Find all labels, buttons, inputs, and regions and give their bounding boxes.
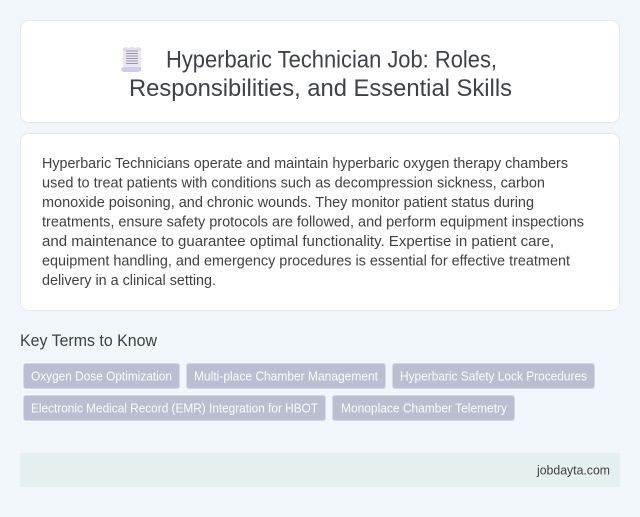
icon: document scroll — [121, 47, 141, 72]
tag: safety lock — [392, 364, 594, 388]
text block: job description: equipment handling, and emergency procedures is essential for effective treatment — [42, 254, 570, 270]
tag: multi-place chamber — [186, 364, 386, 388]
tag list: key terms — [24, 364, 594, 420]
tag: monoplace telemetry — [332, 396, 514, 420]
footer bar — [20, 453, 620, 487]
tag: oxygen dose — [24, 364, 180, 388]
text block: job description: delivery in a clinical setting. — [42, 273, 216, 289]
title — [129, 46, 512, 102]
text block: job description: used to treat patients with conditions such as decompression sickness, carbon — [42, 176, 545, 192]
tag: safety lock: Hyperbaric Safety Lock Procedures — [400, 370, 587, 384]
heading: key terms: Key Terms to Know — [20, 332, 157, 350]
tag: EMR integration: Electronic Medical Record (EMR) Integration for HBOT — [31, 402, 318, 416]
footer bar: jobdayta.com — [536, 464, 610, 478]
text block: job description: and maintenance to guarantee optimal functionality. Expertise in patient care, — [42, 234, 554, 250]
panel: description card — [20, 134, 620, 310]
title: Responsibilities, and Essential Skills — [129, 75, 512, 102]
text block: job description: monoxide poisoning, and chronic wounds. They monitor patient status during — [42, 195, 534, 211]
title: Hyperbaric Technician Job: Roles, — [166, 46, 497, 74]
text block: job description: Hyperbaric Technicians operate and maintain hyperbaric oxygen therapy chambers — [42, 156, 568, 172]
tag: oxygen dose: Oxygen Dose Optimization — [31, 370, 172, 384]
text block: job description: treatments, ensure safety protocols are followed, and perform equipment inspections — [42, 214, 584, 230]
tag: multi-place chamber: Multi-place Chamber Management — [194, 370, 378, 384]
tag: monoplace telemetry: Monoplace Chamber Telemetry — [341, 402, 508, 416]
text block: job description — [42, 156, 584, 289]
panel: title card — [20, 20, 620, 122]
tag: EMR integration — [24, 396, 326, 420]
